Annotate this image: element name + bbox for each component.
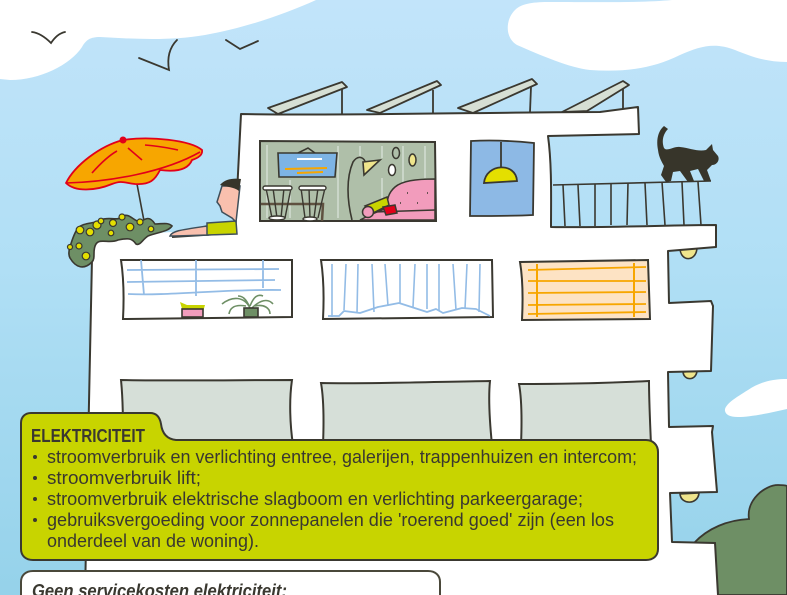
berries — [68, 214, 154, 260]
bullet list: gebruiksvergoeding voor zonnepanelen die 'roerend goed' zijn (een los — [47, 509, 614, 530]
panel background with tab — [21, 413, 658, 560]
building outline — [85, 107, 718, 595]
yellow plant pot — [180, 302, 205, 317]
bullet list: stroomverbruik lift; — [47, 467, 201, 488]
sofa — [360, 179, 435, 220]
wallpaper stripes — [267, 145, 425, 218]
garage doors — [121, 380, 651, 445]
table and stools — [261, 186, 326, 221]
bullet list: onderdeel van de woning). — [47, 530, 259, 551]
cloud: top right — [508, 0, 787, 71]
panel heading: ELEKTRICITEIT — [31, 426, 145, 446]
room wall — [260, 141, 436, 221]
person on terrace — [170, 179, 241, 236]
sofa buttons — [400, 193, 428, 203]
balcony railing — [553, 181, 711, 226]
window frame lines — [127, 260, 281, 296]
parasol — [66, 136, 202, 221]
solar panels — [268, 79, 629, 114]
hair — [220, 179, 241, 191]
bullet list — [33, 446, 637, 551]
arm — [170, 226, 208, 236]
building — [85, 107, 718, 595]
window: blinds and plants — [121, 260, 292, 319]
cloud: lower right — [725, 379, 787, 417]
panel: geen servicekosten — [21, 571, 440, 595]
birds — [32, 32, 258, 70]
window: blue with hanging lamp — [470, 141, 534, 216]
cloud: top left — [0, 0, 316, 80]
shirt — [207, 221, 237, 235]
climbing plant — [68, 214, 172, 267]
canopy ribs — [66, 145, 200, 183]
panel: elektriciteit — [21, 413, 658, 560]
wall mirrors — [388, 148, 416, 176]
balcony lamps — [680, 248, 699, 502]
window: living room — [260, 141, 436, 221]
window: orange blinds — [520, 260, 650, 320]
tree — [694, 485, 787, 595]
painting — [278, 148, 337, 177]
bullet list: stroomverbruik en verlichting entree, galerijen, trappenhuizen en intercom; — [47, 446, 637, 467]
pole — [137, 184, 144, 221]
head — [217, 186, 240, 222]
floor lamp — [348, 157, 380, 220]
cat — [657, 126, 719, 182]
green plant pot — [222, 295, 273, 317]
canopy — [66, 138, 202, 190]
window: curtains — [321, 260, 493, 319]
bullet list: stroomverbruik elektrische slagboom en verlichting parkeergarage; — [47, 488, 583, 509]
